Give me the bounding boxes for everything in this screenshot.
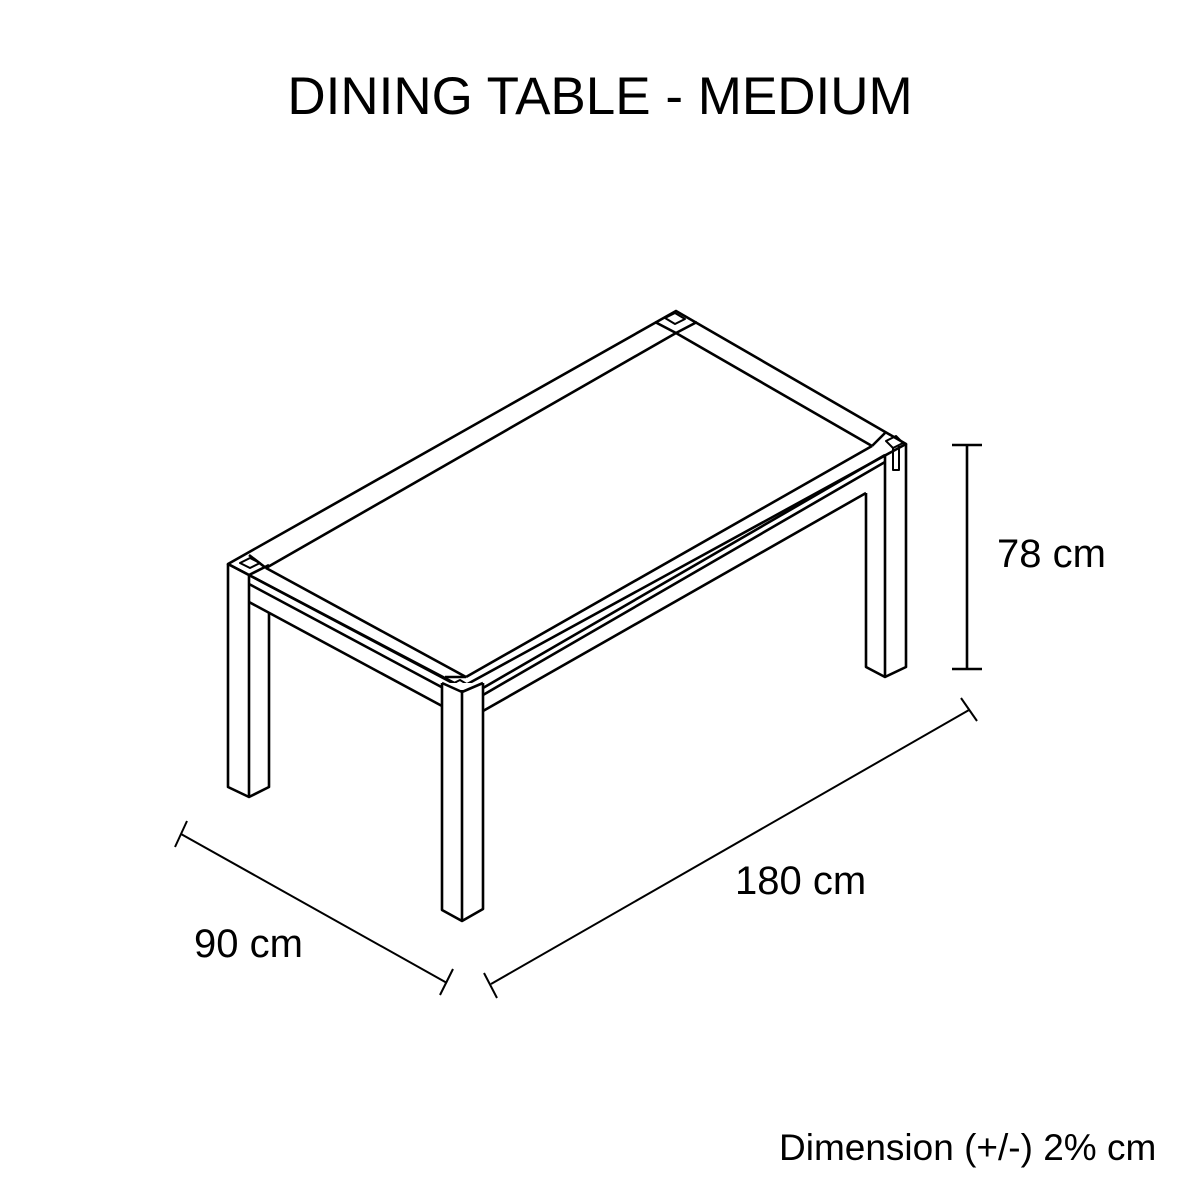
title: DINING TABLE - MEDIUM bbox=[287, 67, 913, 126]
top frame inner lines bbox=[249, 322, 885, 677]
table bbox=[228, 311, 906, 921]
label: 180 cm: 180 cm bbox=[735, 859, 866, 903]
label: 90 cm: 90 cm bbox=[194, 922, 303, 966]
front-right apron bbox=[483, 455, 885, 711]
footnote: Dimension (+/-) 2% cm bbox=[779, 1127, 1156, 1168]
joint squares bbox=[240, 313, 903, 710]
dimension: height bbox=[952, 445, 982, 669]
dimension: length 180 bbox=[484, 698, 977, 998]
label: 78 cm: 78 cm bbox=[997, 532, 1106, 576]
front leg bbox=[442, 683, 483, 921]
front-left apron bbox=[249, 575, 462, 706]
table top outline bbox=[228, 311, 906, 687]
dimension: width 90 bbox=[175, 821, 453, 995]
left leg bbox=[228, 564, 269, 797]
right leg bbox=[866, 444, 906, 677]
